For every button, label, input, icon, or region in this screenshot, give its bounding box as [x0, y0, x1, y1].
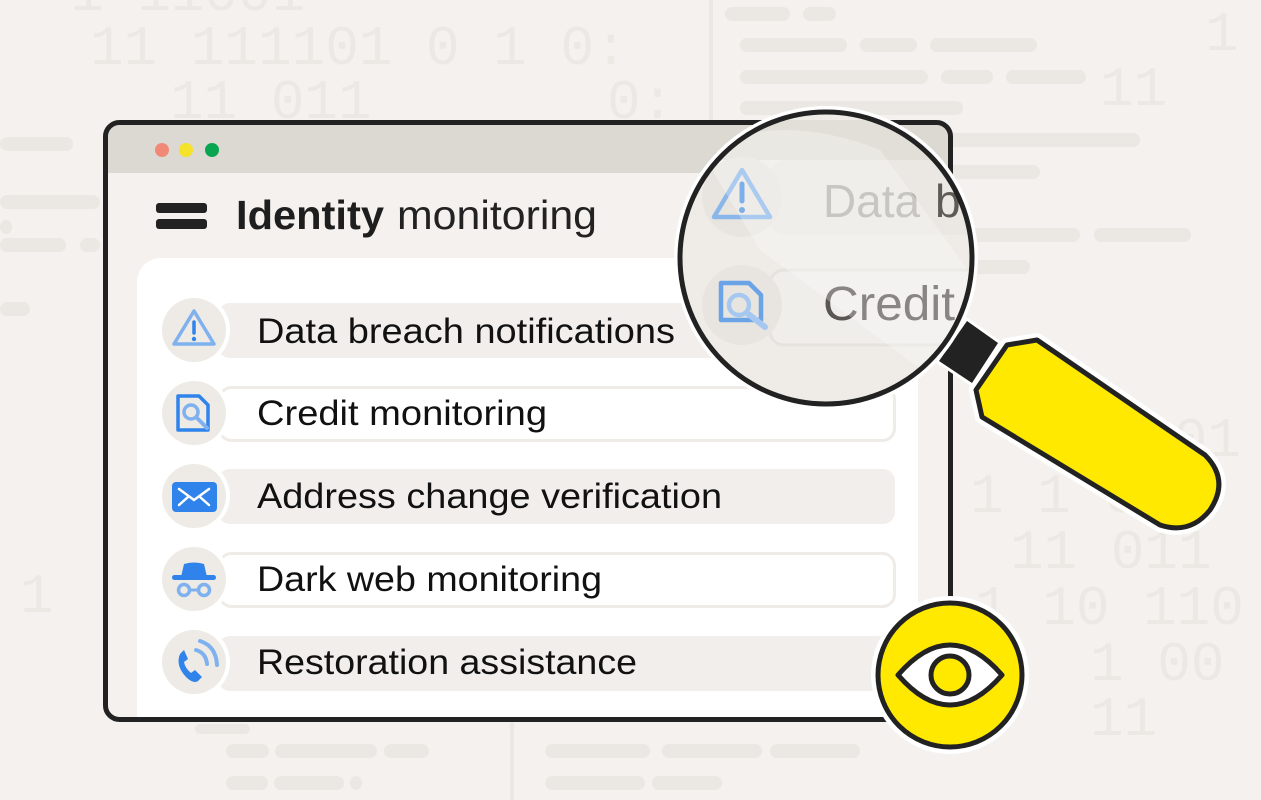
title: Identity	[236, 192, 384, 238]
background: 1	[1205, 3, 1239, 67]
title: monitoring	[397, 192, 597, 238]
background: 11	[1100, 58, 1167, 122]
background: 11 111101 0 1 0:	[90, 17, 628, 81]
background: 1 00	[1090, 633, 1224, 697]
background: 001	[1140, 409, 1241, 473]
row: restoration	[158, 626, 895, 698]
title	[156, 192, 597, 238]
row: address: Address change verification	[257, 477, 722, 516]
lens icon: warning	[712, 168, 772, 220]
row: credit: Credit monitoring	[257, 394, 547, 433]
row: data breach: Data breach notifications	[257, 312, 675, 351]
magnifier lens: Credit	[823, 278, 955, 331]
magnifier lens: Data	[823, 175, 920, 227]
background: 11 011	[170, 71, 372, 135]
row: address	[158, 460, 895, 532]
row: restoration: Restoration assistance	[257, 643, 637, 682]
window dots	[155, 143, 219, 157]
background: 11	[1090, 688, 1157, 752]
row: credit	[158, 377, 894, 449]
background: 1	[20, 565, 54, 629]
background: 1 10 110	[975, 577, 1244, 641]
browser window	[106, 122, 950, 720]
content panel	[137, 258, 918, 717]
magnifier lens	[674, 106, 978, 406]
lens icon: credit	[718, 280, 782, 332]
magnifier handle	[939, 321, 1219, 528]
row: dark web	[158, 543, 894, 615]
eye badge	[871, 596, 1029, 754]
background: 11 011	[1010, 521, 1212, 585]
background: 0:	[607, 71, 674, 135]
background: 1 1 01	[970, 465, 1172, 529]
row: dark web: Dark web monitoring	[257, 560, 602, 599]
row: data breach	[158, 294, 895, 366]
list rows	[158, 294, 895, 698]
magnifier lens: b	[935, 175, 961, 227]
